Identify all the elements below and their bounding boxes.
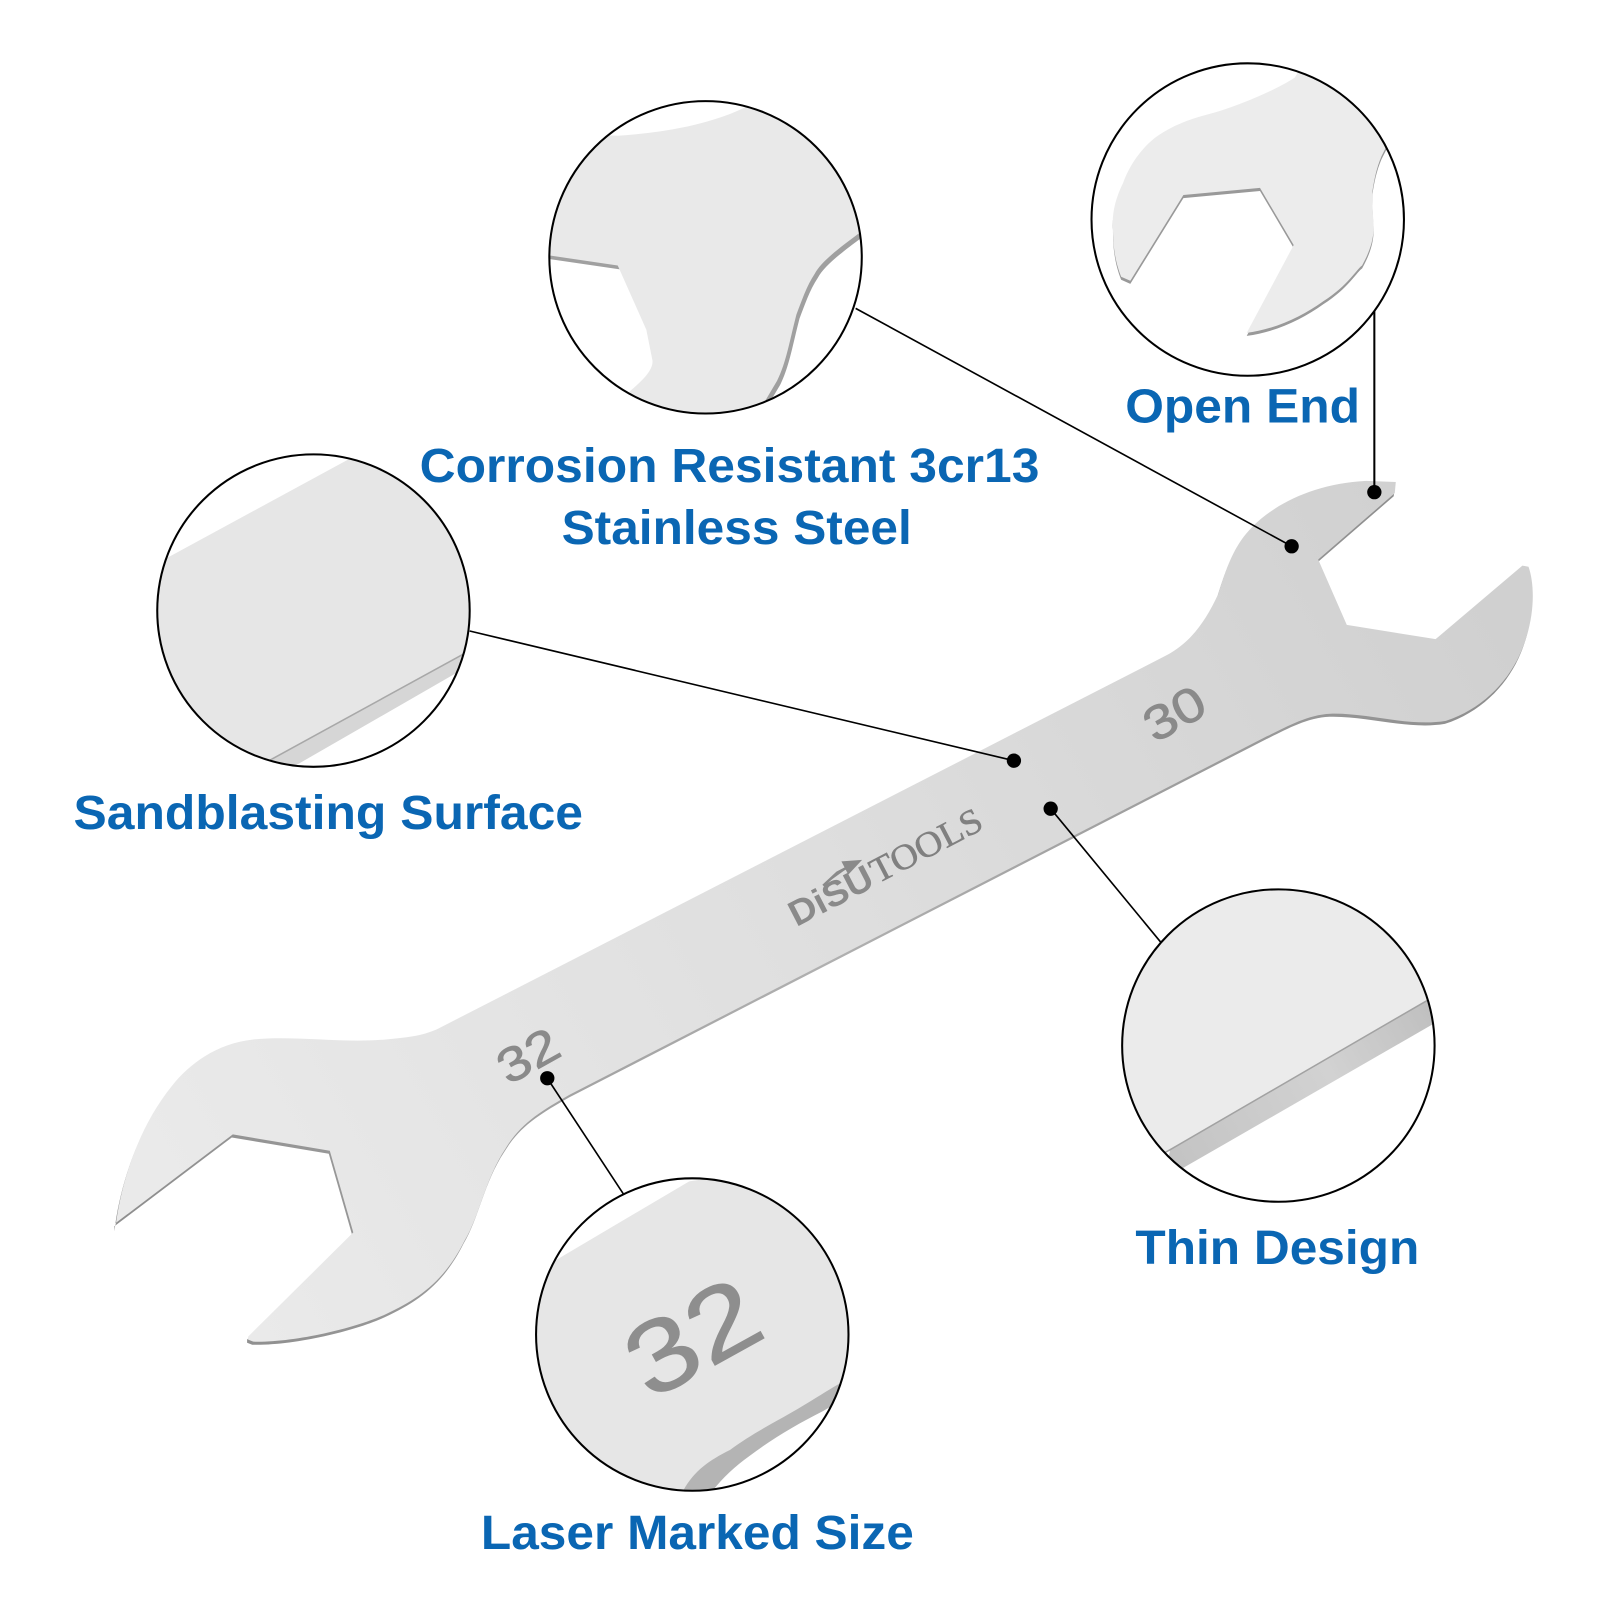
heading: laser marked size: Laser Marked Size <box>481 1506 914 1560</box>
heading: open end: Open End <box>1125 380 1360 434</box>
magnifier: open end <box>1090 62 1405 377</box>
callout dots <box>540 485 1381 1085</box>
heading: corrosion resistant 3cr13 stainless steel <box>420 439 1039 555</box>
heading: thin design: Thin Design <box>1135 1221 1419 1275</box>
magnifier: laser marked size <box>535 1177 850 1492</box>
brand logo <box>780 797 990 934</box>
heading: corrosion resistant 3cr13 stainless steel: Stainless Steel <box>562 501 912 555</box>
heading: sandblasting surface: Sandblasting Surface <box>74 786 583 840</box>
wrench <box>114 481 1533 1345</box>
enlarged size mark 32: 32 <box>605 1255 780 1421</box>
callout lines <box>470 308 1374 1195</box>
magnifier: thin design <box>1121 888 1436 1203</box>
size mark 30 on wrench: 30 <box>1134 676 1215 753</box>
magnifier: sandblasting surface <box>156 453 471 768</box>
size mark 32 on wrench: 32 <box>488 1018 569 1095</box>
brand logo: DiSU <box>782 857 880 934</box>
magnifier: corrosion resistant steel <box>548 100 863 414</box>
brand logo: TOOLS <box>863 800 989 891</box>
heading: corrosion resistant 3cr13 stainless steel: Corrosion Resistant 3cr13 <box>420 439 1039 493</box>
